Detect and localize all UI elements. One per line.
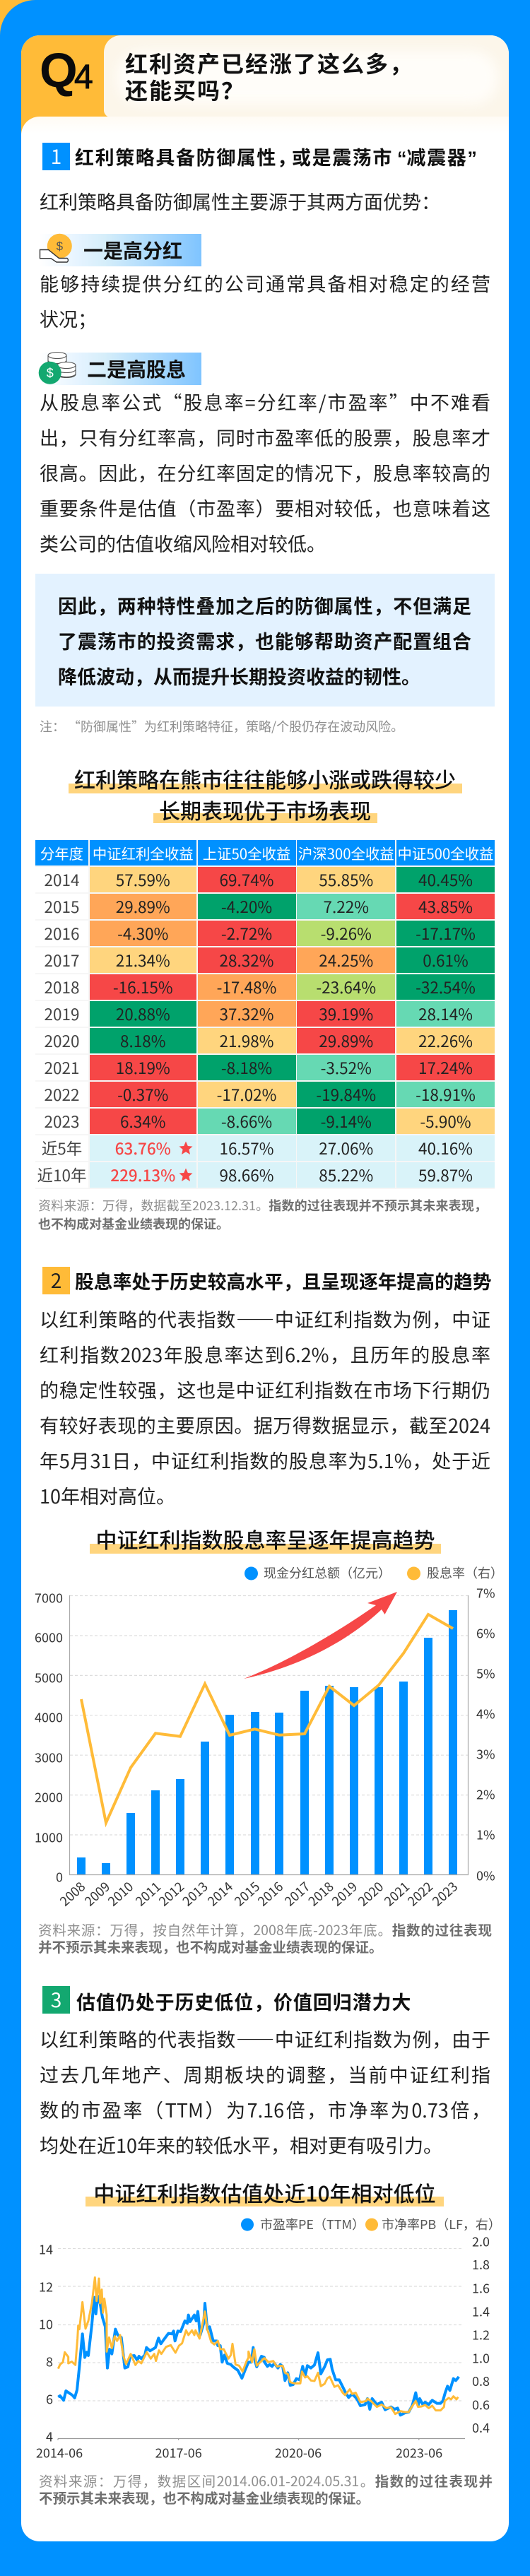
section 3 text [40,2025,490,2158]
right axis labels [476,1584,495,1885]
left axis labels [39,2240,53,2446]
legend: 市净率PB（LF，右） [382,2215,501,2233]
tag label: 二是高股息 [87,355,186,383]
chart 1 title: 中证红利指数股息率呈逐年提高趋势 [96,1523,435,1554]
returns table: 40.16% [418,1137,473,1159]
returns table: 17.24% [418,1056,473,1079]
header inner glow [117,51,498,105]
date labels: 2023-06 [396,2443,442,2462]
intro text: 红利策略具备防御属性主要源于其两方面优势： [40,187,440,215]
returns table: 2023 [45,1110,79,1133]
left axis labels: 4000 [35,1708,63,1727]
year labels: 2016 [254,1877,287,1910]
left axis labels: 8 [46,2353,53,2371]
returns table: 59.87% [418,1164,473,1186]
left axis labels: 4 [46,2428,53,2446]
arrow: rising trend [244,1592,397,1679]
section 3 text: 数的市盈率（TTM）为7.16倍，市净率为0.73倍， [40,2096,490,2123]
year labels: 2012 [155,1877,188,1910]
callout text: 因此，两种特性叠加之后的防御属性，不但满足 [58,591,471,619]
right axis labels: 6% [476,1624,495,1642]
right axis labels: 2.0 [472,2233,490,2251]
returns table: -17.48% [217,976,276,998]
icon: coin in hand: $ [57,240,64,253]
table title: 长期表现优于市场表现 [159,794,371,825]
chart 2 source note: 资料来源：万得，数据区间2014.06.01-2024.05.31。指数的过往表现并 [39,2470,493,2491]
tag: high yield [40,353,201,385]
date labels: 2020-06 [275,2443,322,2462]
returns table: 18.19% [116,1056,170,1079]
chart 1 source note: 资料来源：万得，按自然年计算，2008年底-2023年底。指数的过往表现 [38,1919,492,1939]
year labels: 2009 [81,1877,114,1910]
year labels: 2013 [178,1877,211,1910]
callout [35,574,495,707]
text: high yield: 出，只有分红率高，同时市盈率低的股票，股息率才 [40,423,490,451]
section 2 heading: 股息率处于历史较高水平，且呈现逐年提高的趋势 [75,1267,492,1294]
returns table: -16.15% [113,976,173,998]
returns table: 27.06% [319,1137,373,1159]
year labels: 2019 [328,1877,361,1910]
header badge: Q4: Q [40,43,78,98]
valuation chart [36,2215,501,2462]
year labels: 2021 [380,1877,413,1910]
body panel top [21,117,509,159]
returns table: -4.20% [221,895,272,918]
returns table: 29.89% [319,1029,373,1052]
right axis labels: 1.6 [472,2279,490,2298]
right axis labels: 0% [476,1867,495,1885]
returns table: 7.22% [324,895,369,918]
footnote: 注： “防御属性”为红利策略特征，策略/个股仍存在波动风险。 [40,717,404,735]
chart 2 source note: 不预示其未来表现，也不构成对基金业绩表现的保证。 [39,2487,370,2507]
icon: coin stacks [38,352,76,384]
text: high yield: 从股息率公式“股息率=分红率/市盈率”中不难看 [40,388,490,415]
returns table: 229.13% [110,1164,175,1186]
returns table: 85.22% [319,1164,373,1186]
corner accent [0,0,42,42]
year labels: 2020 [354,1877,387,1910]
section 3 number badge [42,1986,70,2014]
chart 1 source note: 并不预示其未来表现，也不构成对基金业绩表现的保证。 [38,1936,383,1956]
chart 1 title highlight [90,1544,441,1554]
left axis labels: 7000 [35,1588,63,1607]
text: high yield: 类公司的估值收缩风险相对较低。 [40,529,326,557]
text: high yield: 重要条件是估值（市盈率）要相对较低，也意味着这 [40,494,490,521]
left axis labels: 10 [39,2315,53,2333]
right axis labels: 3% [476,1745,495,1763]
chart 2 title highlight [86,2197,444,2206]
callout text: 了震荡市的投资需求，也能够帮助资产配置组合 [58,627,471,654]
returns table: -9.26% [321,922,372,945]
date labels [36,2443,442,2462]
returns table: 39.19% [319,1003,373,1025]
section 3 text: 均处在近10年来的较低水平，相对更有吸引力。 [40,2131,442,2158]
returns table: -8.66% [221,1110,272,1133]
text: high yield [40,388,490,557]
icon: coin in hand [40,233,72,263]
right axis labels: 7% [476,1584,495,1602]
returns table: 2014 [45,868,79,891]
legend: 现金分红总额（亿元） [264,1564,391,1582]
left axis labels: 1000 [35,1828,63,1847]
table title [74,763,456,825]
returns table: 8.18% [120,1029,165,1052]
returns table: 2017 [45,949,79,971]
right axis labels: 2% [476,1785,495,1803]
section 2 text: 10年相对高位。 [40,1482,175,1509]
returns table: 中证500全收益 [398,842,493,863]
chart 2 title: 中证红利指数估值处近10年相对低位 [93,2177,436,2208]
callout text: 降低波动，从而提升长期投资收益的韧性。 [58,662,420,690]
chart 1 source note [38,1919,492,1956]
right axis labels: 1.0 [472,2348,490,2367]
table source note: 也不构成对基金业绩表现的保证。 [38,1215,229,1233]
section 1 number badge [42,143,70,170]
yield line [81,1614,453,1823]
returns table: 29.89% [116,895,170,918]
returns table: 6.34% [120,1110,165,1133]
section 2 text: 有较好表现的主要原因。据万得数据显示，截至2024 [40,1411,490,1438]
returns table: 24.25% [319,949,373,971]
date labels: 2017-06 [155,2443,202,2462]
section 3 text: 过去几年地产、周期板块的调整，当前中证红利指 [40,2060,490,2088]
text: high payout: 能够持续提供分红的公司通常具备相对稳定的经营 [40,269,490,297]
left axis labels: 2000 [35,1788,63,1806]
right axis labels: 0.6 [472,2395,490,2413]
returns table: 2015 [45,895,79,918]
legend: 股息率（右） [427,1564,503,1582]
dividend yield chart [35,1564,503,1910]
section 2 text: 以红利策略的代表指数——中证红利指数为例，中证 [40,1305,490,1333]
title: 还能买吗？ [125,73,245,106]
returns table: -2.72% [221,922,272,945]
year labels [56,1877,461,1910]
Q4 tab background [21,35,163,141]
year labels: 2008 [56,1877,89,1910]
returns table: -3.52% [321,1056,372,1079]
returns table: -0.37% [117,1083,168,1106]
PE line [58,2296,459,2415]
tag label: 一是高分红 [83,236,182,264]
bars: cash dividends [77,1610,457,1874]
header band [104,35,509,117]
table title highlight 2 [153,813,377,823]
text: high payout [40,269,490,332]
section 2 text: 年5月31日，中证红利指数的股息率为5.1%，处于近 [40,1446,490,1474]
left axis labels: 14 [39,2240,53,2258]
returns table: 16.57% [220,1137,273,1159]
returns table: 上证50全收益 [203,842,290,863]
legend: 市盈率PE（TTM） [260,2215,365,2233]
left axis labels: 3000 [35,1748,63,1766]
legend [241,2215,501,2233]
returns table: 近10年 [37,1164,86,1186]
header badge: Q4: 4 [74,59,93,96]
returns table: 沪深300全收益 [298,842,394,863]
returns table: 37.32% [220,1003,273,1025]
section 2 text [40,1305,490,1509]
left axis labels: 6 [46,2389,53,2408]
section 1 number badge: 1 [51,142,61,170]
table title: 红利策略在熊市往往能够小涨或跌得较少 [74,763,456,794]
section 2 text: 的稳定性较强，这也是中证红利指数在市场下行期仍 [40,1376,490,1403]
callout text [58,591,471,690]
returns table: -32.54% [416,976,476,998]
returns table: 2020 [45,1029,79,1052]
returns table: 55.85% [319,868,373,891]
section 3 heading: 估值仍处于历史低位，价值回归潜力大 [76,1987,411,2015]
year labels: 2022 [404,1877,437,1910]
returns table: 69.74% [220,868,273,891]
left axis labels: 6000 [35,1628,63,1646]
returns table: 分年度 [40,842,83,863]
returns table: 0.61% [423,949,469,971]
year labels: 2011 [131,1877,165,1910]
returns table: 63.76% [115,1137,171,1159]
tag: high dividend payout [40,234,201,266]
returns table: 2019 [45,1003,79,1025]
section 1 heading: 红利策略具备防御属性，或是震荡市“减震器” [75,143,477,170]
section 2 number badge [42,1267,70,1294]
returns table: 28.32% [220,949,273,971]
returns table: -17.17% [416,922,476,945]
returns table: 2021 [45,1056,79,1079]
section 3 text: 以红利策略的代表指数——中证红利指数为例，由于 [40,2025,490,2052]
text: high yield: 很高。因此，在分红率固定的情况下，股息率较高的 [40,459,490,486]
section 2 text: 红利指数2023年股息率达到6.2%，且历年的股息率 [40,1340,490,1368]
right axis labels: 0.4 [472,2418,490,2437]
returns table: -9.14% [321,1110,372,1133]
returns table: -5.90% [420,1110,471,1133]
year labels: 2015 [230,1877,264,1910]
returns table: 57.59% [116,868,170,891]
year labels: 2023 [428,1877,461,1910]
returns table: 2018 [45,976,79,998]
returns table: -18.91% [416,1083,476,1106]
date labels: 2014-06 [36,2443,83,2462]
title: 红利资产已经涨了这么多， [125,47,413,79]
PB line [58,2277,458,2414]
right axis labels [472,2233,490,2437]
returns table: 2022 [45,1083,79,1106]
icon: coin stacks: $ [47,366,54,380]
table source note: 资料来源：万得，数据截至2023.12.31。指数的过往表现并不预示其未来表现， [38,1196,487,1215]
text: high payout: 状况； [40,305,97,332]
table title highlight 1 [69,784,462,793]
year labels: 2017 [281,1877,314,1910]
section 3 number badge: 3 [51,1985,61,2014]
returns table: -17.02% [217,1083,276,1106]
returns table: -8.18% [221,1056,272,1079]
right axis labels: 1% [476,1826,495,1844]
right axis labels: 1.8 [472,2255,490,2274]
returns table: -19.84% [316,1083,376,1106]
returns table: 28.14% [418,1003,473,1025]
returns table: 21.98% [220,1029,273,1052]
returns table: 近5年 [42,1137,82,1159]
left axis labels: 5000 [35,1669,63,1687]
left axis labels [35,1588,63,1886]
returns table: 21.34% [116,949,170,971]
legend [245,1564,503,1582]
returns table: 20.88% [116,1003,170,1025]
chart 2 source note [39,2470,493,2507]
right axis labels: 4% [476,1704,495,1723]
title [125,47,413,106]
returns table: 40.45% [418,868,473,891]
year labels: 2010 [104,1877,137,1910]
right axis labels: 1.4 [472,2302,490,2320]
returns table: -23.64% [316,976,376,998]
returns table: 22.26% [418,1029,473,1052]
year labels: 2018 [304,1877,337,1910]
returns table: 2016 [45,922,79,945]
section 2 number badge: 2 [51,1266,61,1294]
right axis labels: 1.2 [472,2326,490,2344]
table source note [38,1196,487,1233]
returns table: 43.85% [418,895,473,918]
left axis labels: 12 [39,2278,53,2296]
left axis labels: 0 [56,1868,63,1886]
returns table: 98.66% [220,1164,273,1186]
right axis labels: 5% [476,1665,495,1683]
returns table [35,840,495,1189]
right axis labels: 0.8 [472,2372,490,2390]
year labels: 2014 [204,1877,237,1910]
returns table: 中证红利全收益 [93,842,194,863]
returns table: -4.30% [117,922,168,945]
